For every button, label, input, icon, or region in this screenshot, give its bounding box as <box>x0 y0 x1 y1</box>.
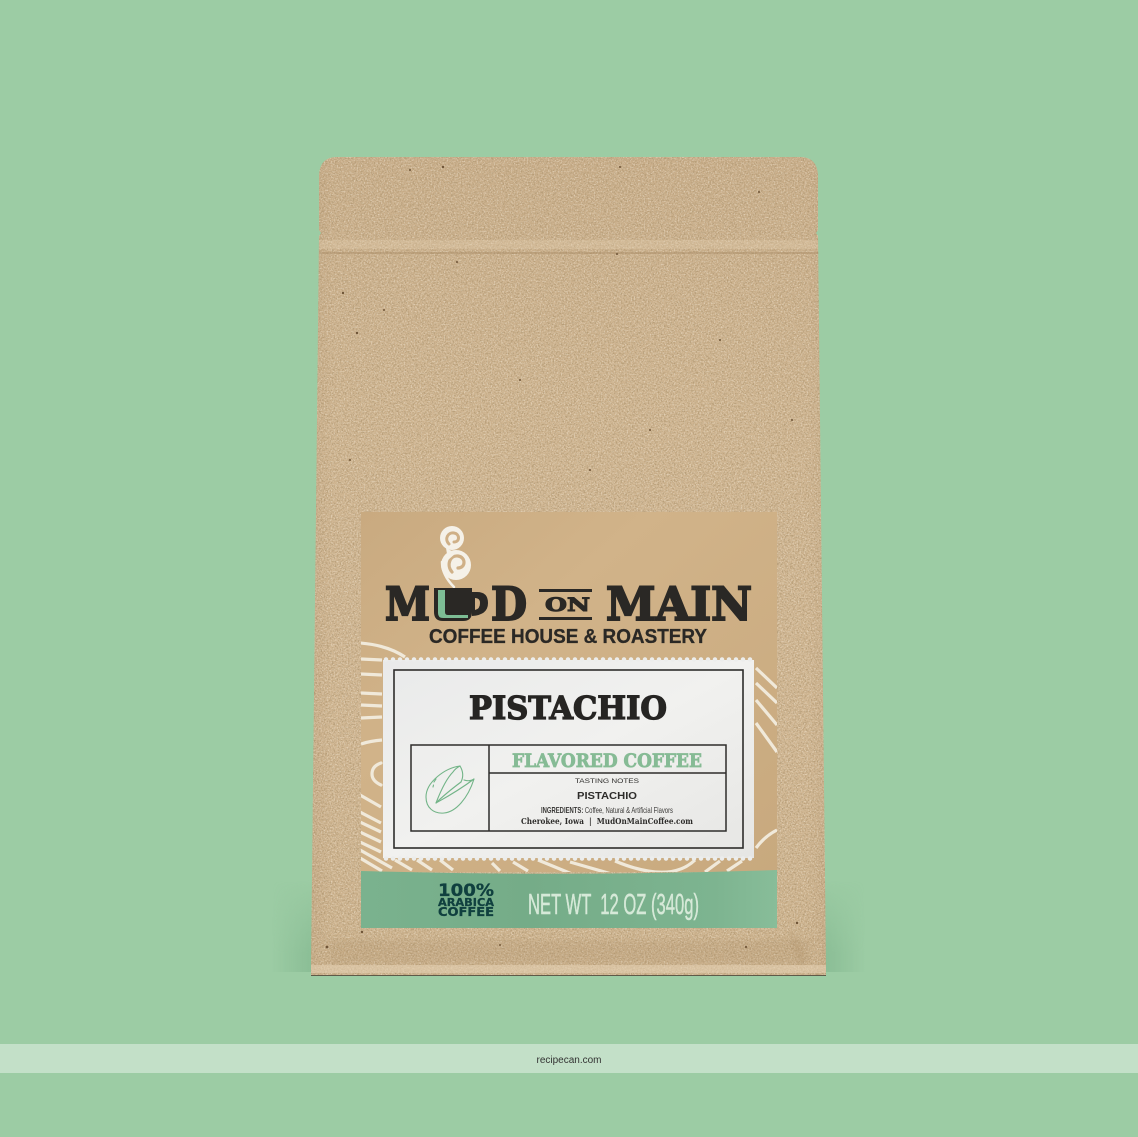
arabica badge: 100% <box>438 881 494 901</box>
logo wordmark: M <box>385 577 430 631</box>
card inner frame <box>394 670 743 848</box>
tasting notes label: TASTING NOTES <box>575 778 640 785</box>
kraft coffee bag <box>305 150 835 980</box>
coffee type heading: FLAVORED COFFEE <box>512 750 702 772</box>
paper specks <box>326 166 798 948</box>
tasting note value: PISTACHIO <box>577 790 637 802</box>
logo word: on: ON <box>545 594 590 616</box>
bottom gusset <box>311 935 826 976</box>
net weight: NET WT 12 OZ (340g) <box>528 889 699 921</box>
logo wordmark: D <box>491 577 527 631</box>
green footer band <box>361 870 777 928</box>
icon: coffee mug as U <box>434 588 488 621</box>
logo word: on <box>539 589 592 620</box>
bag shadow <box>289 913 848 972</box>
logo steam swirl <box>440 526 471 587</box>
logo wordmark <box>385 577 752 631</box>
source banner <box>0 1044 1138 1073</box>
white product card <box>383 660 754 858</box>
product name: PISTACHIO <box>469 689 667 727</box>
arabica badge: COFFEE <box>438 905 494 919</box>
source banner: recipecan.com <box>536 1055 602 1066</box>
arabica badge: ARABICA <box>438 896 494 909</box>
location and website: Cherokee, Iowa | MudOnMainCoffee.com <box>521 816 693 826</box>
ingredients: INGREDIENTS: Coffee, Natural & Artificial Flavors <box>541 805 673 815</box>
pistachio line pattern <box>360 643 777 875</box>
icon: pistachio <box>426 766 474 813</box>
zipper seam <box>319 240 819 254</box>
arabica badge <box>438 881 494 919</box>
front label <box>360 512 777 928</box>
label tan background <box>361 512 777 872</box>
detail table <box>411 745 726 831</box>
logo tagline: COFFEE HOUSE & ROASTERY <box>429 626 708 648</box>
logo wordmark: MAIN <box>606 577 752 631</box>
